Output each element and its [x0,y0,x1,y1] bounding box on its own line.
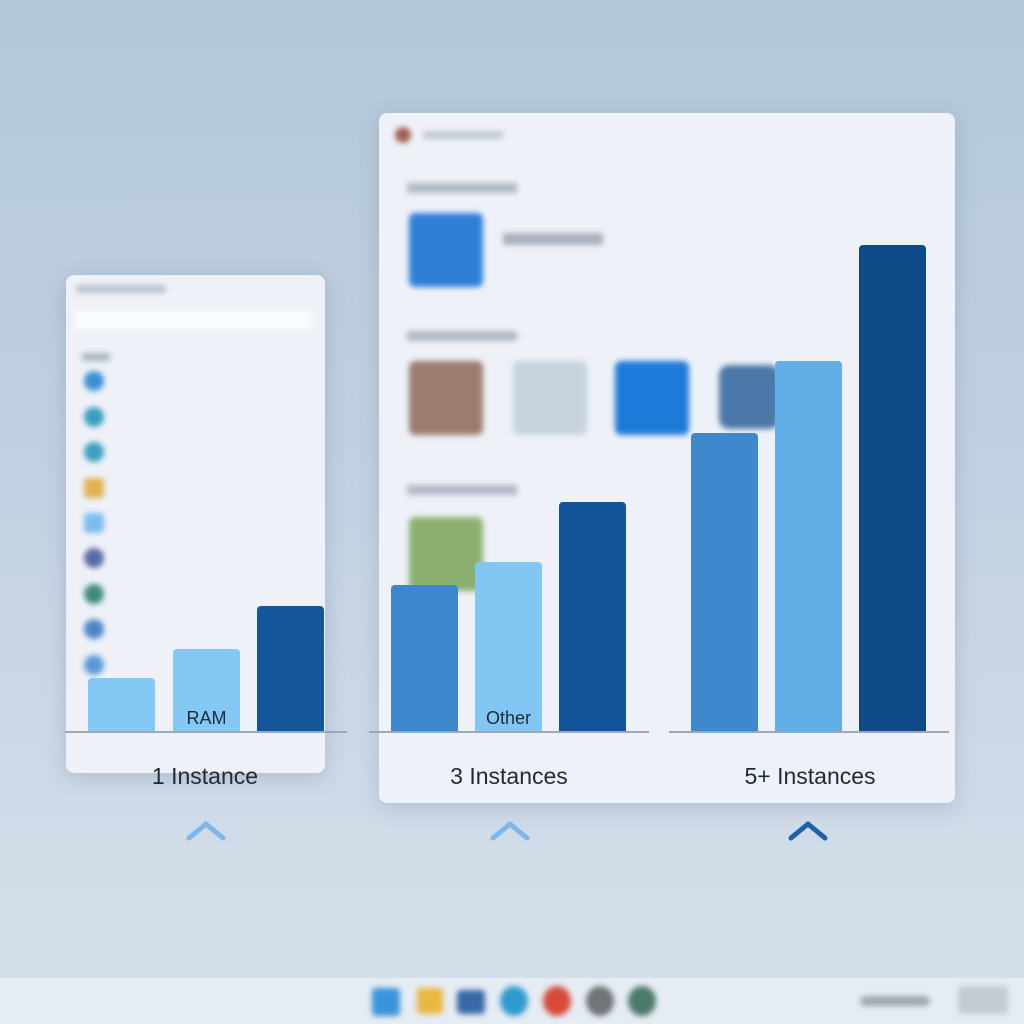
text: Other [486,708,531,728]
text: RAM [186,708,226,728]
taskbar [0,978,1024,1024]
icon: chevron 3 [788,821,828,840]
chart: 1 instance [65,606,347,733]
label: 5+ Instances: 5+ Instances [744,763,876,789]
icon: chevron 2 [490,821,530,840]
label: 1 Instance: 1 Instance [152,763,258,789]
panel: left window [66,275,325,773]
icon: chevron 1 [186,821,226,840]
chart: 3 instances [369,502,649,733]
chart: 5+ instances [669,245,949,733]
panel: middle window [379,113,955,803]
label: 3 Instances: 3 Instances [450,763,568,789]
